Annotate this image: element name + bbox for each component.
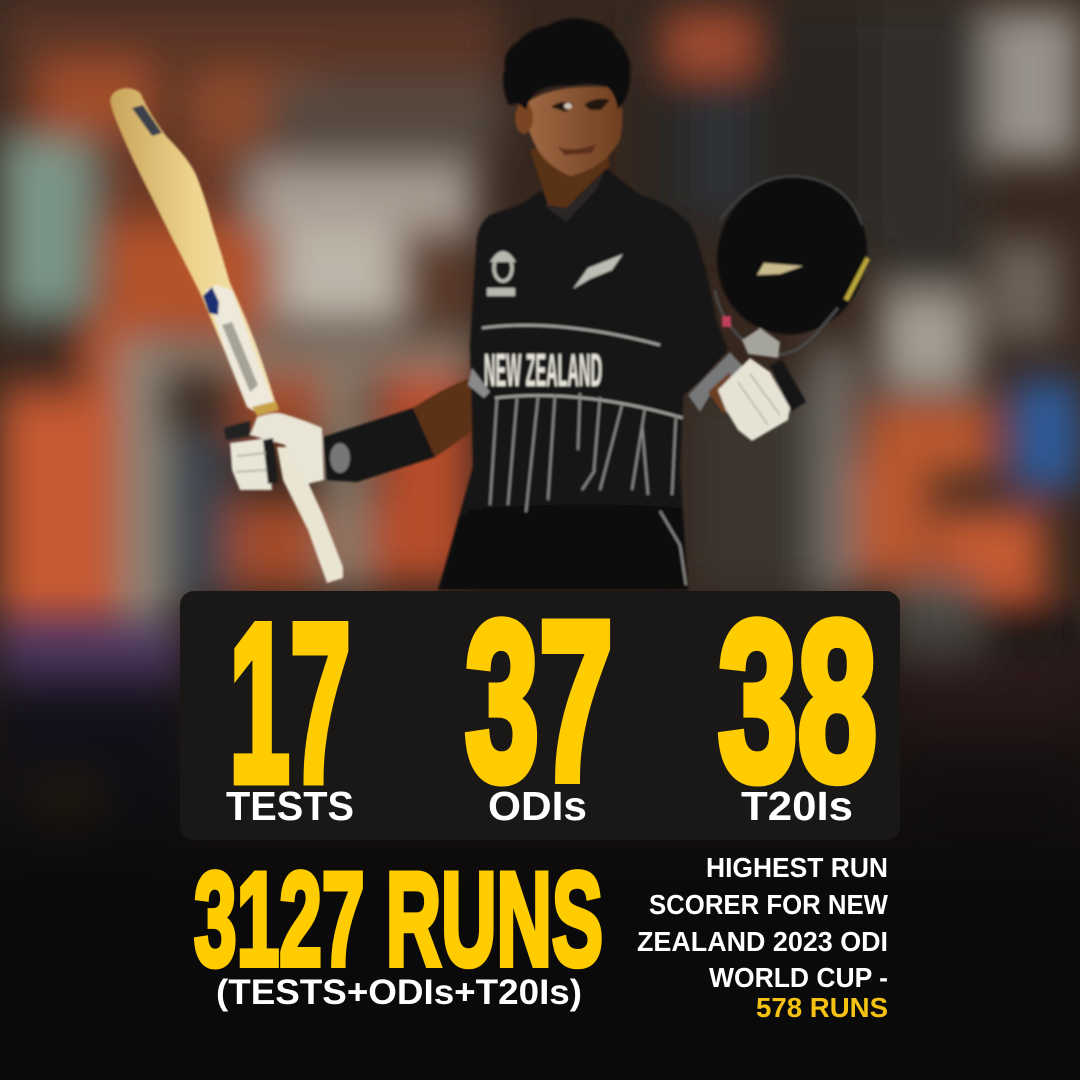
left arm and wristband bbox=[323, 378, 488, 482]
highest run scorer callout bbox=[637, 852, 889, 1023]
stat: 17 tests: TESTS bbox=[226, 783, 354, 829]
stat: 37 ODIs: 37 bbox=[465, 574, 613, 827]
highest run scorer callout: SCORER FOR NEW bbox=[649, 889, 889, 920]
batting glove bbox=[224, 413, 324, 490]
stat: 38 T20Is: 38 bbox=[718, 574, 877, 827]
highest run scorer callout: ZEALAND 2023 ODI bbox=[637, 926, 888, 957]
stat: 17 tests bbox=[226, 576, 354, 829]
silver fern badge bbox=[573, 254, 623, 289]
stat: 38 T20Is bbox=[718, 574, 877, 829]
cricket bat bbox=[110, 88, 343, 583]
formats note: (TESTS+ODIs+T20Is) bbox=[216, 973, 582, 1012]
total runs: 3127 RUNS bbox=[194, 846, 603, 994]
torso in black jersey: NEW ZEALAND bbox=[484, 344, 602, 396]
curly hair bbox=[503, 18, 630, 110]
highest run scorer callout: WORLD CUP - bbox=[709, 962, 888, 993]
right forearm and glove bbox=[708, 358, 806, 441]
world cup badge bbox=[487, 251, 516, 296]
stats panel: 17 bbox=[229, 576, 351, 829]
player figure bbox=[110, 18, 889, 590]
stat: 37 ODIs bbox=[465, 574, 613, 829]
highest run scorer callout: HIGHEST RUN bbox=[706, 852, 888, 883]
highest run scorer callout: 578 RUNS bbox=[756, 992, 888, 1023]
torso in black jersey bbox=[438, 165, 748, 590]
helmet bbox=[695, 155, 889, 358]
stats panel bbox=[180, 574, 900, 840]
neck and head bbox=[503, 18, 630, 208]
stat: 37 ODIs: ODIs bbox=[488, 783, 587, 829]
bottom dark fade bbox=[0, 590, 1080, 890]
stat: 38 T20Is: T20Is bbox=[741, 783, 853, 829]
total runs bbox=[194, 846, 603, 1012]
